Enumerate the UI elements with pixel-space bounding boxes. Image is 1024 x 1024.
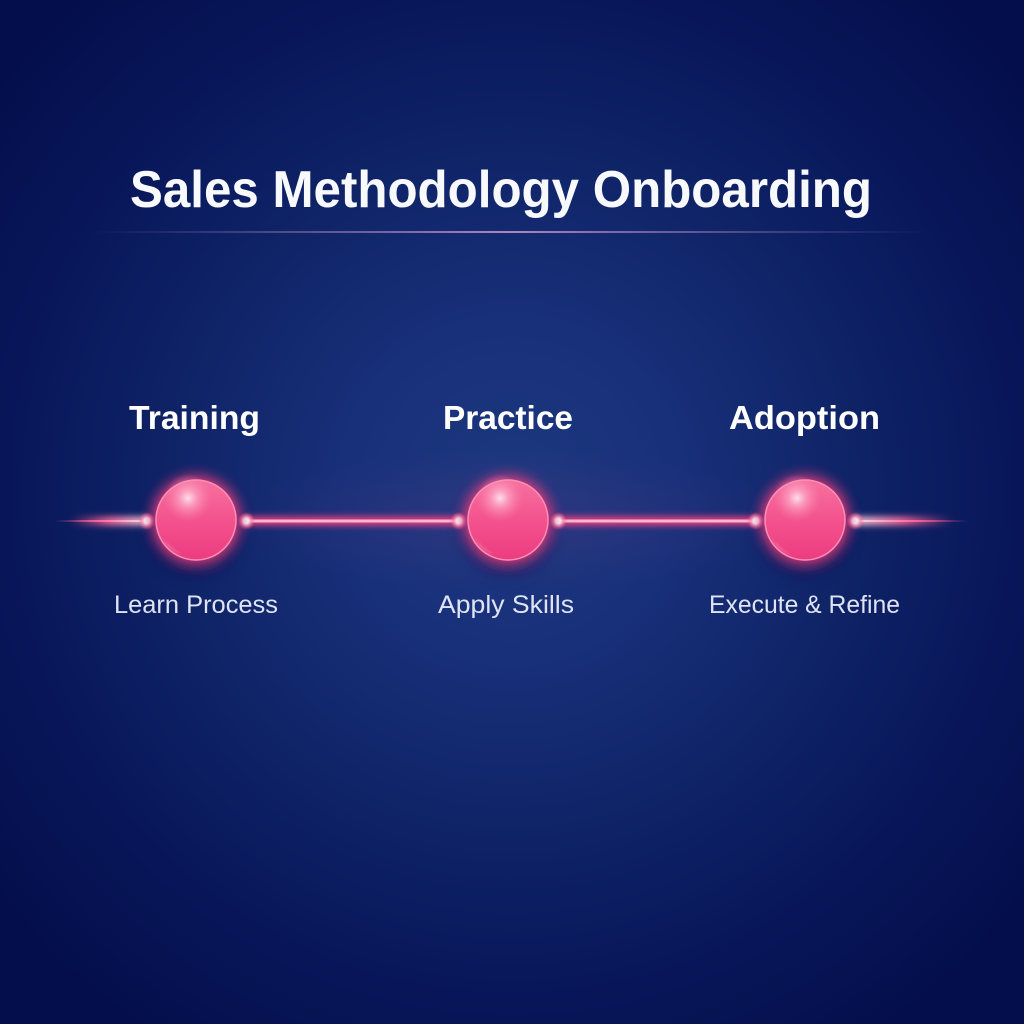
label: Execute & Refine: Execute & Refine xyxy=(709,591,900,619)
title: Sales Methodology Onboarding xyxy=(130,161,872,219)
title underline xyxy=(90,231,930,233)
heading: Training: Training xyxy=(129,399,260,436)
sphere: Adoption xyxy=(761,474,849,572)
label: Learn Process: Learn Process xyxy=(114,591,278,619)
purple glow behind timeline xyxy=(200,420,824,620)
step descriptions xyxy=(114,591,900,619)
step headings xyxy=(129,399,880,436)
sphere: Practice xyxy=(464,474,552,572)
timeline line xyxy=(55,517,968,525)
line end sparks xyxy=(138,512,864,530)
label: Apply Skills: Apply Skills xyxy=(438,591,574,619)
sphere: Training xyxy=(152,474,240,572)
heading: Practice: Practice xyxy=(443,399,573,436)
heading: Adoption: Adoption xyxy=(729,399,880,436)
